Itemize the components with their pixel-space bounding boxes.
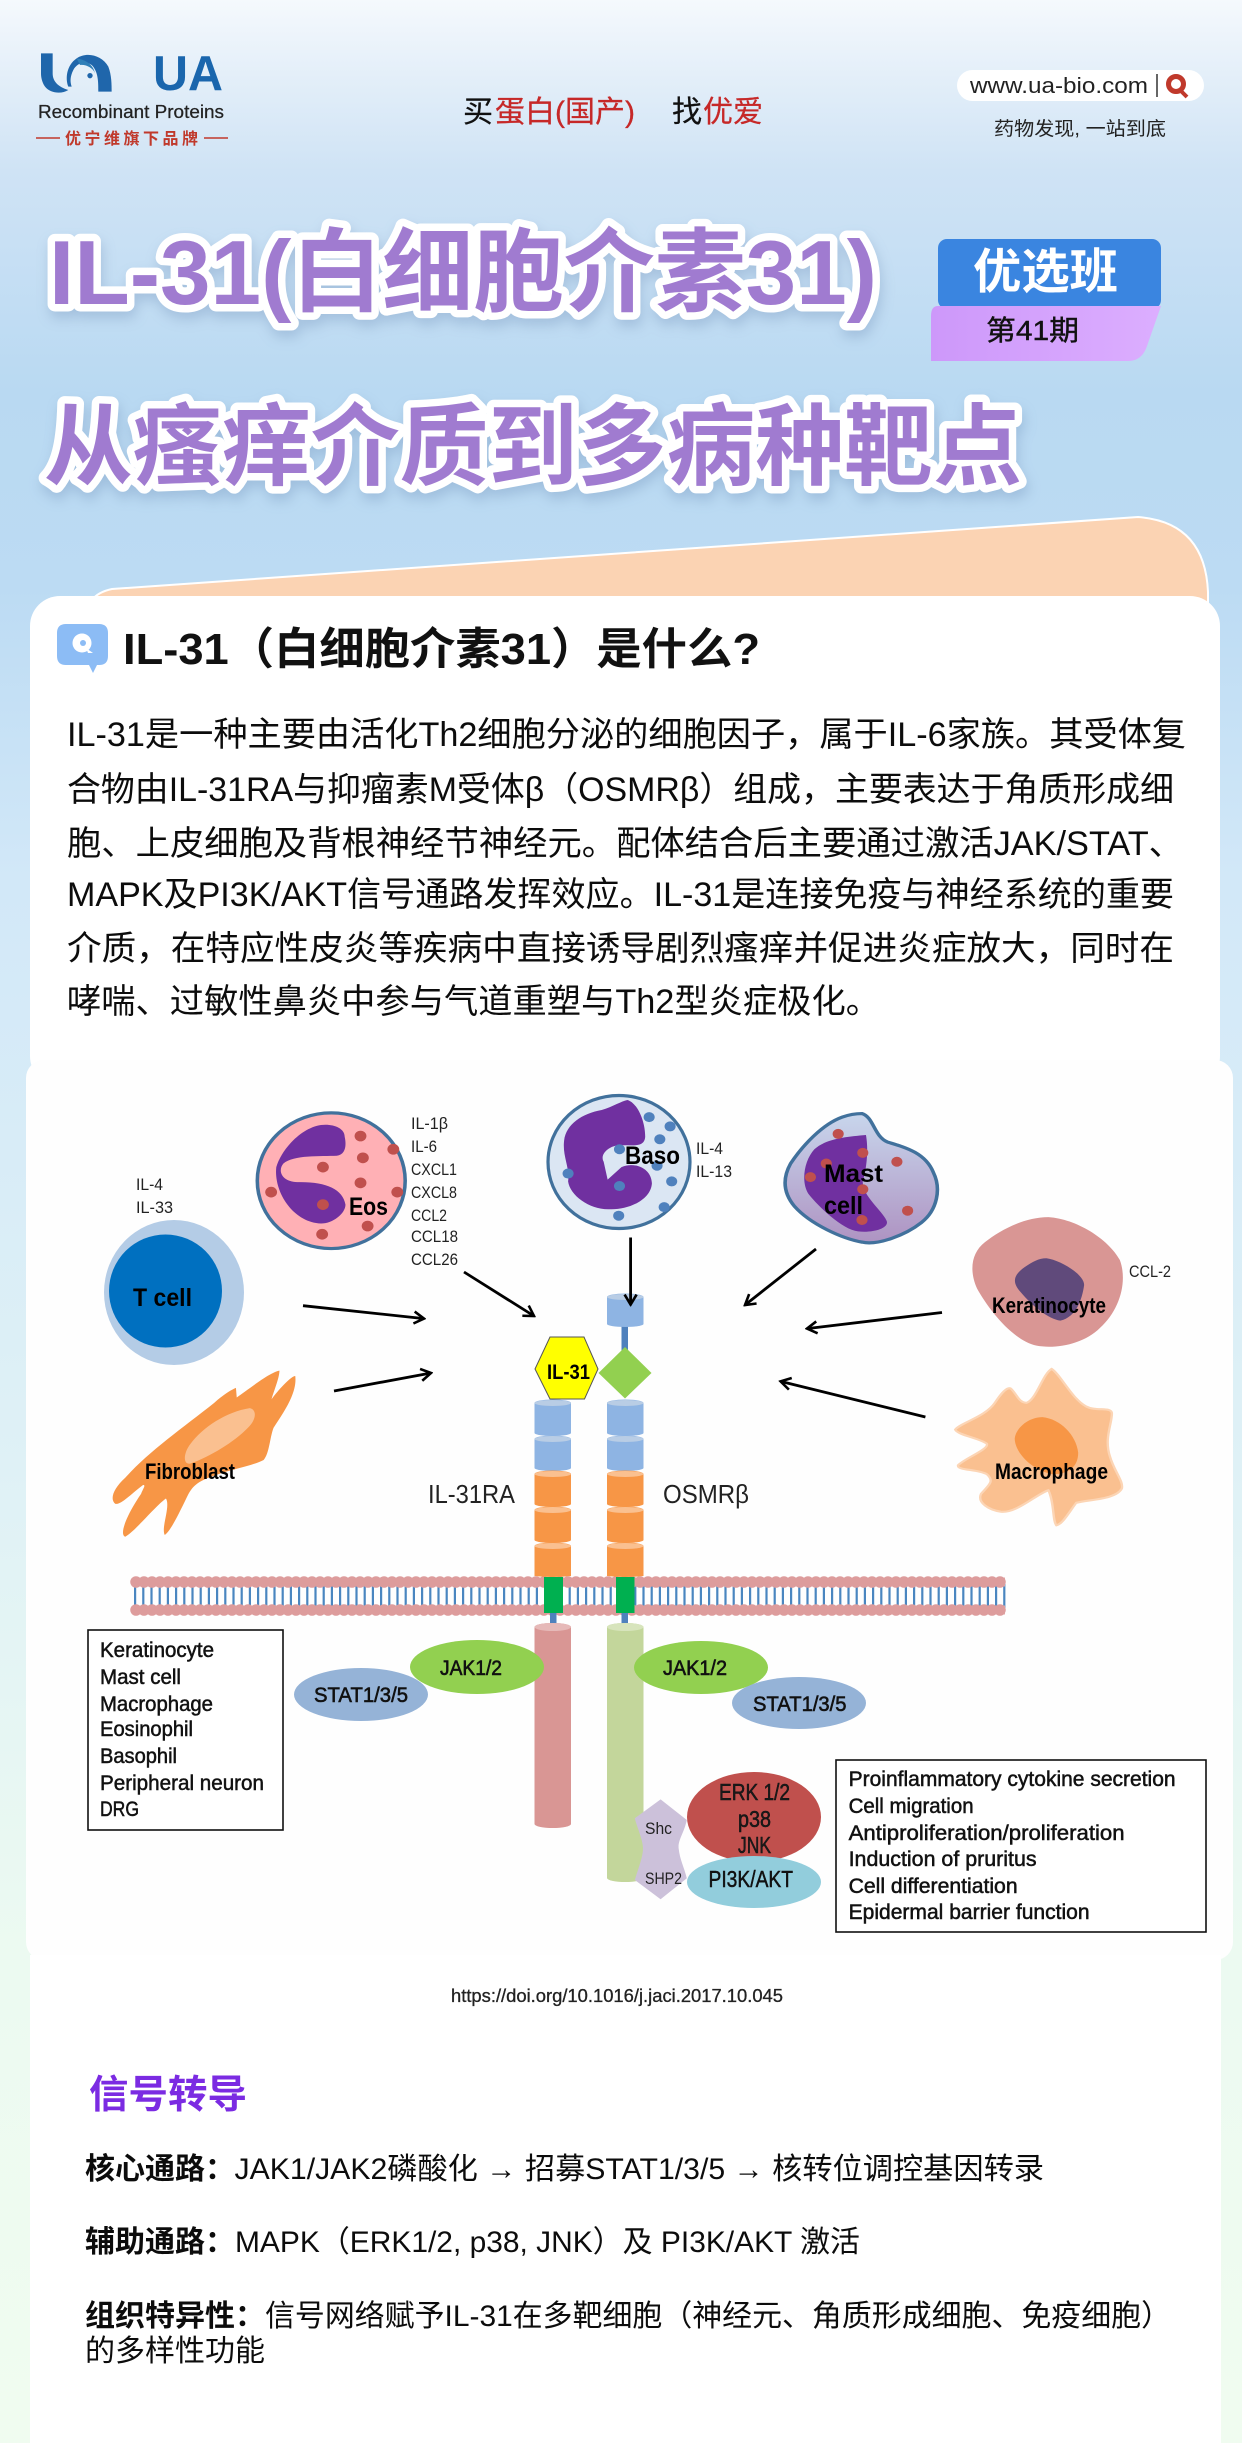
badge: issue bbox=[931, 306, 1161, 361]
arrows bbox=[303, 1238, 942, 1417]
adaptors: Shc and SHP2 bbox=[635, 1799, 687, 1899]
box: biological effects: Epidermal barrier function bbox=[849, 1901, 1090, 1924]
core pathway: JAK1/JAK2磷酸化 → 招募STAT1/3/5 → 核转位调控基因转录 bbox=[234, 2153, 1044, 2186]
website pill bbox=[957, 70, 1204, 101]
adaptors: Shc and SHP2: SHP2 bbox=[645, 1869, 682, 1888]
tissue specificity: 组织特异性： bbox=[85, 2300, 265, 2333]
auxiliary pathway: 辅助通路： bbox=[85, 2226, 235, 2259]
STAT left: STAT1/3/5 bbox=[314, 1684, 408, 1707]
auxiliary pathway: MAPK（ERK1/2, p38, JNK）及 PI3K/AKT 激活 bbox=[235, 2226, 860, 2259]
eosinophil cytokines: IL-1β bbox=[411, 1114, 448, 1133]
icon: Q bubble bbox=[57, 624, 108, 673]
slogan: 优爱 bbox=[703, 96, 763, 129]
JAK right bbox=[634, 1641, 768, 1694]
text block: intro: 介质，在特应性皮炎等疾病中直接诱导剧烈瘙痒并促进炎症放大，同时在 bbox=[67, 930, 1174, 968]
box: expressing cells: Keratinocyte bbox=[100, 1639, 214, 1662]
T cell cytokines bbox=[136, 1175, 173, 1217]
cell: fibroblast bbox=[113, 1371, 295, 1537]
MAPK group: p38 bbox=[738, 1806, 771, 1832]
badge: issue: 第41期 bbox=[986, 315, 1079, 346]
slogan: 蛋白(国产) bbox=[495, 96, 635, 129]
basophil cytokines: IL-13 bbox=[696, 1162, 732, 1181]
eosinophil cytokines bbox=[411, 1114, 458, 1269]
core pathway: 核心通路： bbox=[85, 2153, 235, 2186]
T cell cytokines: IL-33 bbox=[136, 1198, 173, 1217]
text block: intro: MAPK及PI3K/AKT信号通路发挥效应。IL-31是连接免疫与神经系统的重要 bbox=[67, 876, 1174, 914]
title line 1: IL-31(白细胞介素31) bbox=[49, 223, 877, 324]
box: expressing cells: Macrophage bbox=[100, 1693, 213, 1716]
cell: mast cell: cell bbox=[824, 1192, 863, 1220]
text block: intro: 合物由IL-31RA与抑瘤素M受体β（OSMRβ）组成，主要表达于角质形成细 bbox=[67, 771, 1174, 809]
keratinocyte cytokine: CCL-2 bbox=[1129, 1262, 1171, 1281]
box: expressing cells: Eosinophil bbox=[100, 1718, 193, 1741]
text block: intro: 胞、上皮细胞及背根神经节神经元。配体结合后主要通过激活JAK/STAT、 bbox=[67, 825, 1183, 863]
box: biological effects: Cell migration bbox=[849, 1795, 974, 1818]
cell: fibroblast: Fibroblast bbox=[145, 1459, 236, 1484]
box: expressing cells: Mast cell bbox=[100, 1666, 181, 1689]
T cell cytokines: IL-4 bbox=[136, 1175, 163, 1194]
text block: intro: IL-31是一种主要由活化Th2细胞分泌的细胞因子，属于IL-6家族。其受体复 bbox=[67, 716, 1186, 754]
box: expressing cells: DRG bbox=[100, 1798, 139, 1821]
box: expressing cells bbox=[88, 1630, 283, 1830]
adaptors: Shc and SHP2: Shc bbox=[645, 1819, 672, 1838]
box: biological effects bbox=[836, 1760, 1206, 1932]
tissue specificity: 的多样性功能 bbox=[85, 2335, 265, 2368]
eosinophil cytokines: CXCL1 bbox=[411, 1160, 457, 1179]
eosinophil cytokines: IL-6 bbox=[411, 1137, 437, 1156]
tagline: 药物发现, 一站到底 bbox=[994, 118, 1166, 140]
cell: T cell: T cell bbox=[133, 1284, 192, 1312]
box: biological effects: Proinflammatory cytokine secretion bbox=[849, 1768, 1176, 1791]
website pill: www.ua-bio.com bbox=[969, 73, 1148, 98]
heading: IL-31（白细胞介素31）是什么? bbox=[123, 625, 760, 674]
cell: eosinophil: Eos bbox=[349, 1193, 388, 1221]
box: expressing cells: Basophil bbox=[100, 1745, 177, 1768]
label: IL-31RA: IL-31RA bbox=[428, 1479, 516, 1509]
cell: macrophage bbox=[955, 1369, 1122, 1525]
box: biological effects: Induction of pruritus bbox=[849, 1848, 1037, 1871]
text block: intro: 哮喘、过敏性鼻炎中参与气道重塑与Th2型炎症极化。 bbox=[67, 983, 880, 1021]
panel: what is IL-31 bbox=[30, 596, 1220, 1086]
tissue specificity bbox=[85, 2300, 1171, 2368]
slogan: 找 bbox=[672, 96, 702, 129]
box: biological effects: Cell differentiation bbox=[849, 1875, 1018, 1898]
MAPK group: ERK 1/2 bbox=[719, 1779, 790, 1805]
badge bbox=[931, 239, 1161, 361]
UA wordmark: UA bbox=[153, 47, 223, 101]
receptor: OSMR beta bbox=[598, 1294, 652, 1882]
logo mark bbox=[41, 53, 112, 93]
text block: intro bbox=[67, 716, 1186, 1021]
membrane bbox=[134, 1582, 1008, 1610]
icon: diamond bbox=[598, 1347, 652, 1398]
ligand: IL-31 hexagon: IL-31 bbox=[547, 1361, 590, 1384]
eosinophil cytokines: CCL18 bbox=[411, 1227, 458, 1246]
basophil cytokines: IL-4 bbox=[696, 1139, 723, 1158]
receptor: IL-31RA bbox=[534, 1400, 571, 1828]
eosinophil cytokines: CCL2 bbox=[411, 1206, 447, 1225]
box: biological effects: Antiproliferation/proliferation bbox=[849, 1822, 1125, 1845]
logo bbox=[36, 47, 228, 148]
JAK left bbox=[410, 1640, 544, 1694]
PI3K/AKT bbox=[687, 1856, 821, 1908]
cell: keratinocyte: Keratinocyte bbox=[992, 1293, 1106, 1318]
source link: https://doi.org/10.1016/j.jaci.2017.10.045 bbox=[451, 1986, 783, 2006]
peach tab bbox=[92, 517, 1208, 610]
cell: basophil: Baso bbox=[625, 1142, 680, 1170]
tissue specificity: 信号网络赋予IL-31在多靶细胞（神经元、角质形成细胞、免疫细胞） bbox=[265, 2300, 1171, 2333]
JAK left: JAK1/2 bbox=[440, 1657, 502, 1680]
icon: search bbox=[1168, 76, 1187, 97]
eosinophil cytokines: CXCL8 bbox=[411, 1183, 457, 1202]
MAPK group bbox=[687, 1772, 821, 1862]
box: expressing cells: Peripheral neuron bbox=[100, 1772, 264, 1795]
STAT left bbox=[294, 1668, 428, 1721]
Recombinant Proteins: Recombinant Proteins bbox=[38, 102, 224, 122]
basophil cytokines bbox=[696, 1139, 732, 1181]
JAK right: JAK1/2 bbox=[663, 1657, 727, 1680]
MAPK group: JNK bbox=[738, 1832, 771, 1858]
cell: basophil bbox=[548, 1096, 690, 1228]
STAT right: STAT1/3/5 bbox=[753, 1693, 846, 1716]
ligand: IL-31 hexagon bbox=[535, 1337, 598, 1399]
cell: eosinophil bbox=[257, 1113, 405, 1249]
cell: keratinocyte bbox=[972, 1217, 1123, 1347]
brand line: 优宁维旗下品牌 bbox=[65, 129, 198, 148]
title line 2: 从瘙痒介质到多病种靶点 bbox=[44, 397, 1022, 497]
heading: 信号转导 bbox=[89, 2074, 247, 2117]
cell: T cell bbox=[104, 1220, 244, 1365]
PI3K/AKT: PI3K/AKT bbox=[708, 1866, 793, 1892]
panel: signalling diagram bbox=[26, 1060, 1233, 1960]
panel: signal transduction bbox=[30, 1955, 1221, 2443]
cell: macrophage: Macrophage bbox=[995, 1459, 1108, 1484]
badge: blue bbox=[938, 239, 1161, 309]
STAT right bbox=[732, 1677, 866, 1729]
badge: blue: 优选班 bbox=[973, 246, 1118, 299]
cell: mast cell bbox=[785, 1114, 937, 1243]
label: OSMR beta: OSMRβ bbox=[663, 1479, 749, 1509]
eosinophil cytokines: CCL26 bbox=[411, 1250, 458, 1269]
slogan: 买 bbox=[463, 96, 493, 129]
cell: mast cell: Mast bbox=[824, 1160, 884, 1188]
